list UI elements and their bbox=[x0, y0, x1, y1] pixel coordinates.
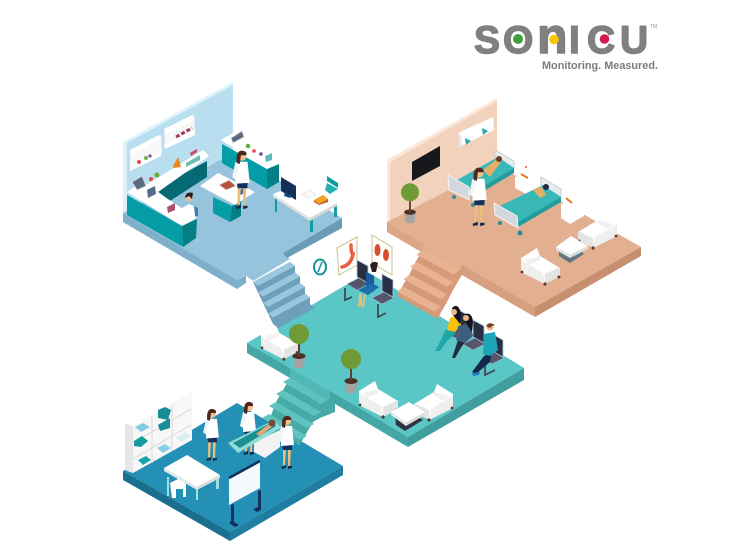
left counter bbox=[127, 176, 197, 247]
room: teal waiting room bbox=[247, 235, 524, 447]
lab wall bbox=[123, 82, 233, 213]
logo: SONICU bbox=[474, 8, 658, 72]
television bbox=[412, 146, 440, 181]
clock bbox=[314, 260, 326, 274]
poster: kidneys bbox=[372, 235, 392, 275]
armchair right of table bbox=[414, 384, 453, 422]
blue floor bbox=[123, 403, 343, 541]
computer desk bbox=[273, 176, 338, 232]
nurse right bbox=[278, 416, 294, 469]
poster: stomach bbox=[337, 237, 357, 275]
scientist seated bbox=[182, 193, 198, 218]
wall shelf left bbox=[130, 135, 162, 171]
monitor stand bbox=[284, 192, 292, 198]
logo status dots bbox=[513, 34, 609, 44]
armchair right bbox=[578, 212, 617, 250]
coffee table bbox=[391, 402, 425, 431]
stairs: teal to blue bbox=[262, 368, 335, 446]
paper bbox=[302, 190, 316, 198]
plant bbox=[401, 183, 419, 223]
patient on treatment bed bbox=[228, 420, 281, 458]
ward floor bbox=[387, 165, 641, 317]
woman in yellow bbox=[435, 306, 461, 351]
logo wordmark: SOnICU bbox=[474, 8, 648, 64]
whiteboard bbox=[229, 461, 261, 527]
armchair left bbox=[521, 248, 560, 286]
scientist standing bbox=[232, 151, 250, 209]
room: peach ward bbox=[387, 98, 641, 319]
stairs: ward to waiting room bbox=[397, 243, 466, 319]
nurse bbox=[469, 168, 487, 226]
waiting bench with three people bbox=[435, 306, 504, 376]
wall shelf right bbox=[164, 115, 195, 149]
nurse centre bbox=[240, 402, 256, 455]
room: blue procedure room bbox=[123, 368, 343, 541]
book cover bbox=[314, 199, 328, 205]
book stack bbox=[314, 195, 328, 204]
coffee table bbox=[556, 236, 588, 263]
nightstand two bbox=[561, 197, 584, 224]
plant centre bbox=[341, 349, 361, 394]
lab floor bbox=[123, 153, 342, 289]
armchair by wall bbox=[261, 325, 299, 361]
monitor bbox=[281, 177, 296, 200]
waiting bench with seated woman bbox=[345, 260, 394, 317]
stairs: lab to waiting room bbox=[253, 262, 315, 328]
wall shelf bbox=[458, 117, 494, 148]
ward wall bbox=[387, 98, 497, 222]
teal chair seat bbox=[325, 183, 338, 194]
nightstand one bbox=[515, 166, 540, 194]
hospital bed two bbox=[494, 177, 561, 236]
hospital bed one bbox=[448, 150, 514, 207]
trademark: TM bbox=[650, 24, 657, 30]
man in teal bbox=[472, 323, 498, 376]
table with stool bbox=[164, 455, 220, 500]
teal chair back bbox=[327, 176, 338, 188]
plant near chair bbox=[289, 324, 309, 368]
nurse left bbox=[203, 409, 219, 461]
armchair left of table bbox=[359, 381, 398, 419]
tagline: Monitoring. Measured. bbox=[542, 60, 658, 72]
room: lab bbox=[123, 82, 342, 289]
teal floor bbox=[247, 272, 524, 447]
back counter bbox=[146, 149, 209, 201]
woman in grey-blue bbox=[452, 314, 473, 358]
centre island bbox=[200, 173, 255, 222]
shelving unit bbox=[125, 390, 192, 473]
right back counter bbox=[221, 131, 279, 189]
